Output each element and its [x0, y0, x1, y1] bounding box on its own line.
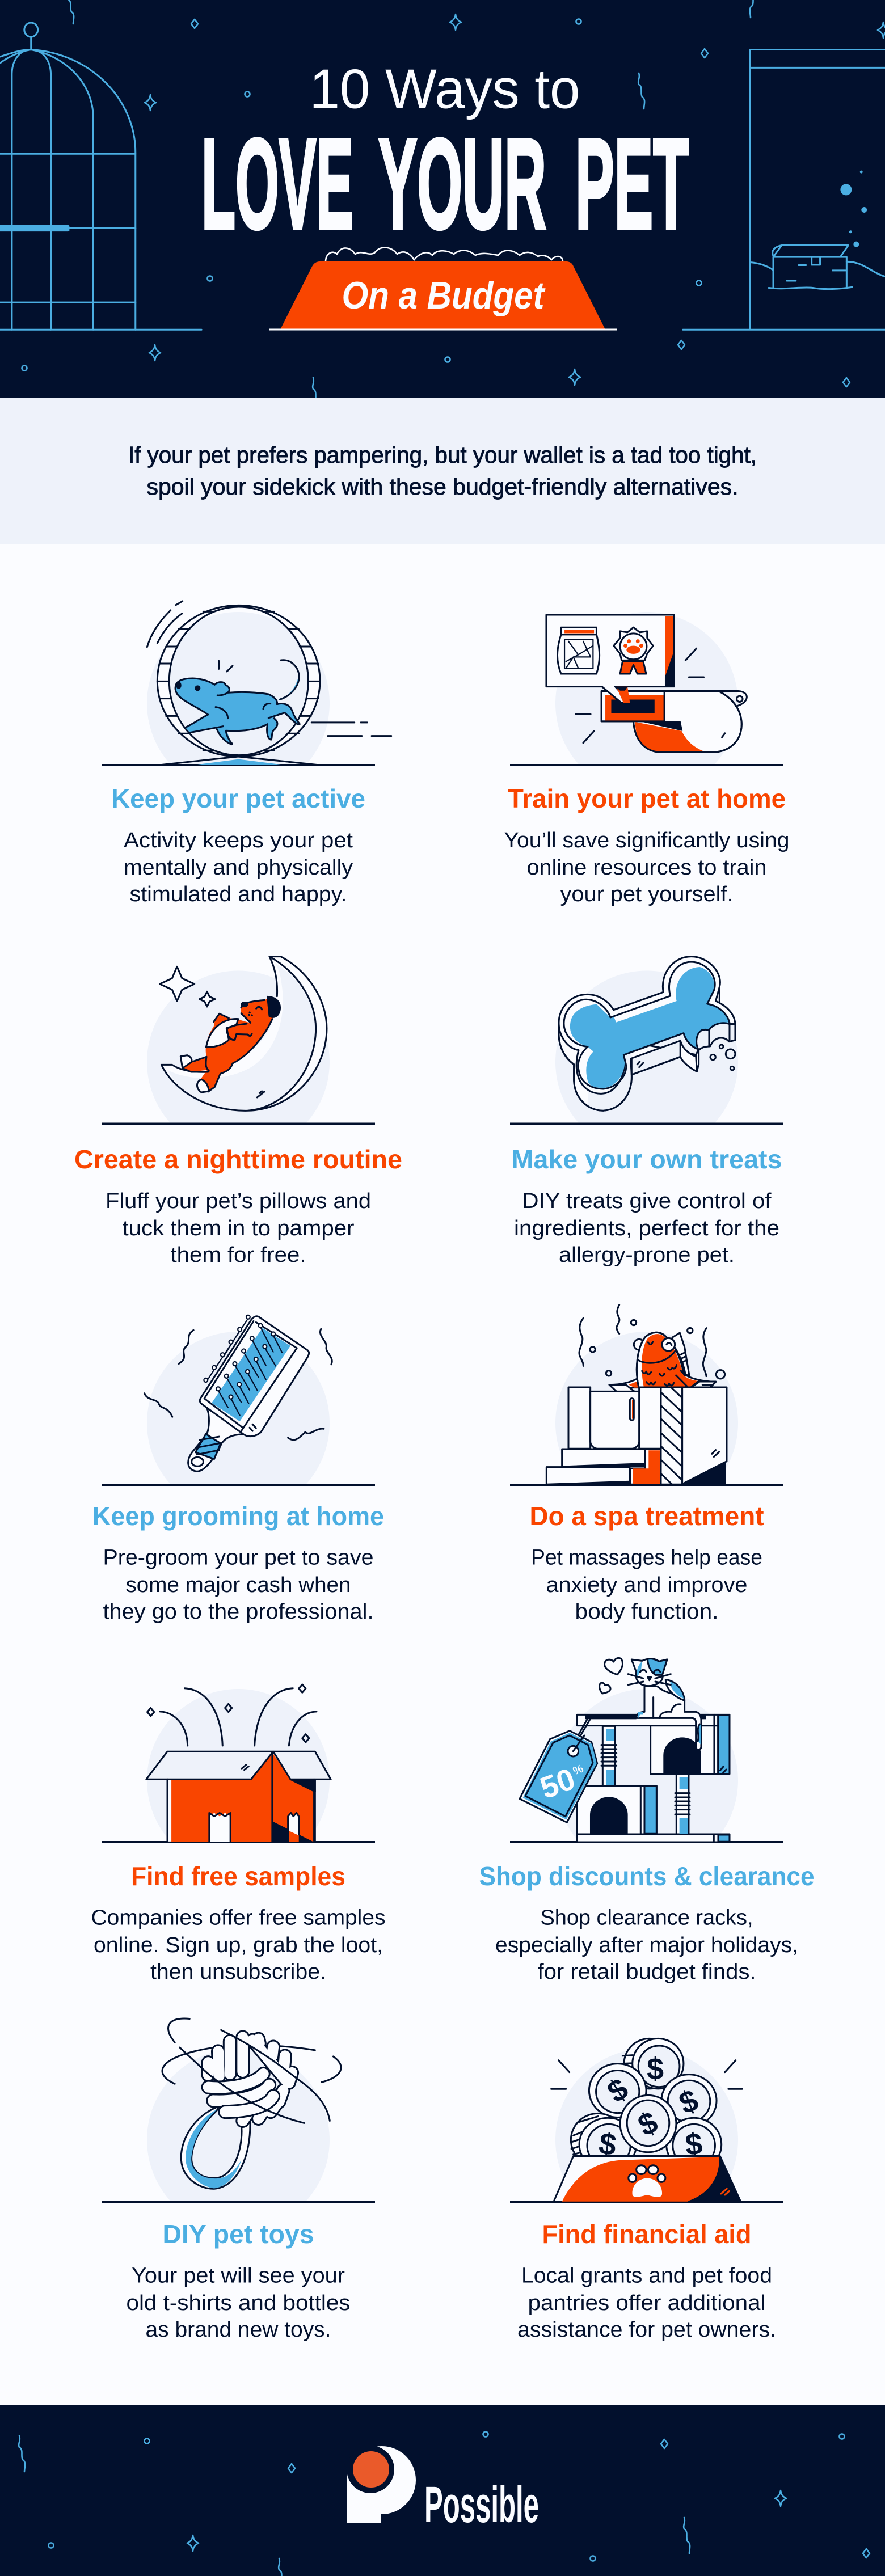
icon: fish in spa tub: [546, 1305, 727, 1485]
icon: hamster wheel: [147, 601, 320, 765]
description: [517, 2264, 776, 2342]
panel: header: PET: [575, 112, 689, 255]
panel: create a nighttime routine: [74, 957, 402, 1267]
heading: Do a spa treatment: [530, 1501, 764, 1531]
heading: Find financial aid: [542, 2219, 751, 2249]
heading: Create a nighttime routine: [74, 1145, 402, 1174]
description: ingredients, perfect for the: [514, 1217, 779, 1240]
description: Pet massages help ease: [531, 1546, 762, 1570]
decorative footer stars and squiggles: [19, 2432, 870, 2576]
description: [106, 1189, 371, 1267]
intro text: [128, 442, 757, 500]
panel: DIY pet toys: [102, 2018, 375, 2342]
dollar signs, back row: $: [597, 2126, 618, 2163]
heading: DIY pet toys: [162, 2219, 314, 2249]
description: then unsubscribe.: [150, 1960, 326, 1984]
title: Love Your Pet: YOUR: [378, 112, 546, 255]
description: Activity keeps your pet: [124, 829, 353, 852]
description: as brand new toys.: [145, 2318, 331, 2342]
heading: Find free samples: [131, 1861, 345, 1891]
panel: train your pet at home: [504, 612, 790, 906]
heading: Train your pet at home: [508, 784, 786, 813]
panel: footer: [0, 2405, 885, 2576]
description: some major cash when: [126, 1573, 351, 1597]
intro text: If your pet prefers pampering, but your wallet is a tad too tight,: [128, 442, 757, 468]
icon: bitten bone: [559, 957, 735, 1110]
description: your pet yourself.: [560, 882, 733, 906]
description: Pre-groom your pet to save: [103, 1546, 373, 1570]
dollar signs, back row: $: [601, 2072, 634, 2109]
price tag label: 50: [536, 1762, 579, 1805]
heading: Shop discounts & clearance: [479, 1861, 815, 1891]
panel: find free samples: [91, 1684, 386, 1984]
description: Your pet will see your: [132, 2264, 345, 2288]
description: mentally and physically: [124, 856, 353, 880]
icon: food bowl with subtitle: [269, 247, 617, 330]
panel: find financial aid: [510, 2038, 783, 2342]
panel: intro band: [0, 398, 885, 544]
description: allergy-prone pet.: [559, 1243, 735, 1267]
icon: whistle with speech bubble: [546, 615, 747, 752]
panel: make your own treats: [510, 957, 783, 1267]
description: Shop clearance racks,: [540, 1906, 753, 1929]
description: body function.: [575, 1600, 718, 1624]
dollar sign, front coin: $: [633, 2105, 663, 2143]
icon: grooming brush: [144, 1315, 332, 1471]
dollar signs, back row: $: [684, 2127, 704, 2162]
price tag percent: %: [571, 1762, 585, 1777]
description: stimulated and happy.: [129, 882, 347, 906]
description: they go to the professional.: [103, 1600, 373, 1624]
panel: keep your pet active: [102, 601, 391, 906]
title: Love Your Pet: LOVE: [201, 112, 353, 255]
panel: header: [0, 0, 885, 413]
title: 10 Ways to: 10 Ways to: [310, 58, 580, 120]
description: [495, 1906, 798, 1984]
icon: open box with samples: [146, 1684, 331, 1842]
logo: Possible wordmark: Possible: [424, 2477, 539, 2533]
icon: back row of coins: [571, 2038, 722, 2171]
description: You’ll save significantly using: [504, 829, 790, 852]
description: [91, 1906, 386, 1984]
description: tuck them in to pamper: [123, 1217, 355, 1240]
description: them for free.: [170, 1243, 306, 1267]
description: for retail budget finds.: [538, 1960, 756, 1984]
description: online resources to train: [526, 856, 767, 880]
logo: Possible mark: [347, 2446, 416, 2523]
description: [124, 829, 353, 906]
heading: Keep your pet active: [111, 784, 365, 813]
heading: Keep grooming at home: [92, 1501, 384, 1531]
description: anxiety and improve: [546, 1573, 748, 1597]
description: Companies offer free samples: [91, 1906, 386, 1929]
panel: do a spa treatment: [510, 1305, 783, 1624]
description: [126, 2264, 351, 2342]
decorative stars and squiggles: [22, 0, 885, 413]
description: especially after major holidays,: [495, 1933, 798, 1957]
panel: shop discounts and clearance: [479, 1658, 815, 1984]
icon: food bowl with paw: [551, 2060, 742, 2202]
description: [531, 1546, 762, 1624]
panel: keep grooming at home: [92, 1315, 384, 1624]
description: [514, 1189, 779, 1267]
icon: front coin: [620, 2095, 676, 2152]
icon: dog sleeping on crescent moon: [160, 957, 327, 1110]
dollar signs, back row: $: [647, 2052, 664, 2086]
description: Local grants and pet food: [521, 2264, 772, 2288]
speed lines: [311, 723, 391, 736]
intro text: spoil your sidekick with these budget-friendly alternatives.: [146, 474, 739, 500]
description: pantries offer additional: [528, 2291, 766, 2315]
icon: doorway with box: [683, 50, 885, 330]
icon: bird cage: [0, 23, 201, 330]
icon: rope toy: [162, 2018, 341, 2189]
subtitle: On a Budget: On a Budget: [342, 274, 546, 317]
description: assistance for pet owners.: [517, 2318, 776, 2342]
description: Fluff your pet’s pillows and: [106, 1189, 371, 1213]
description: [504, 829, 790, 906]
dollar signs, back row: $: [675, 2083, 703, 2121]
description: DIY treats give control of: [522, 1189, 772, 1213]
description: online. Sign up, grab the loot,: [94, 1933, 383, 1957]
heading: Make your own treats: [512, 1145, 782, 1174]
dollar signs, back row: [597, 2052, 704, 2163]
icon: cat tree with price tag: [520, 1658, 730, 1842]
description: old t-shirts and bottles: [126, 2291, 351, 2315]
description: [103, 1546, 373, 1624]
